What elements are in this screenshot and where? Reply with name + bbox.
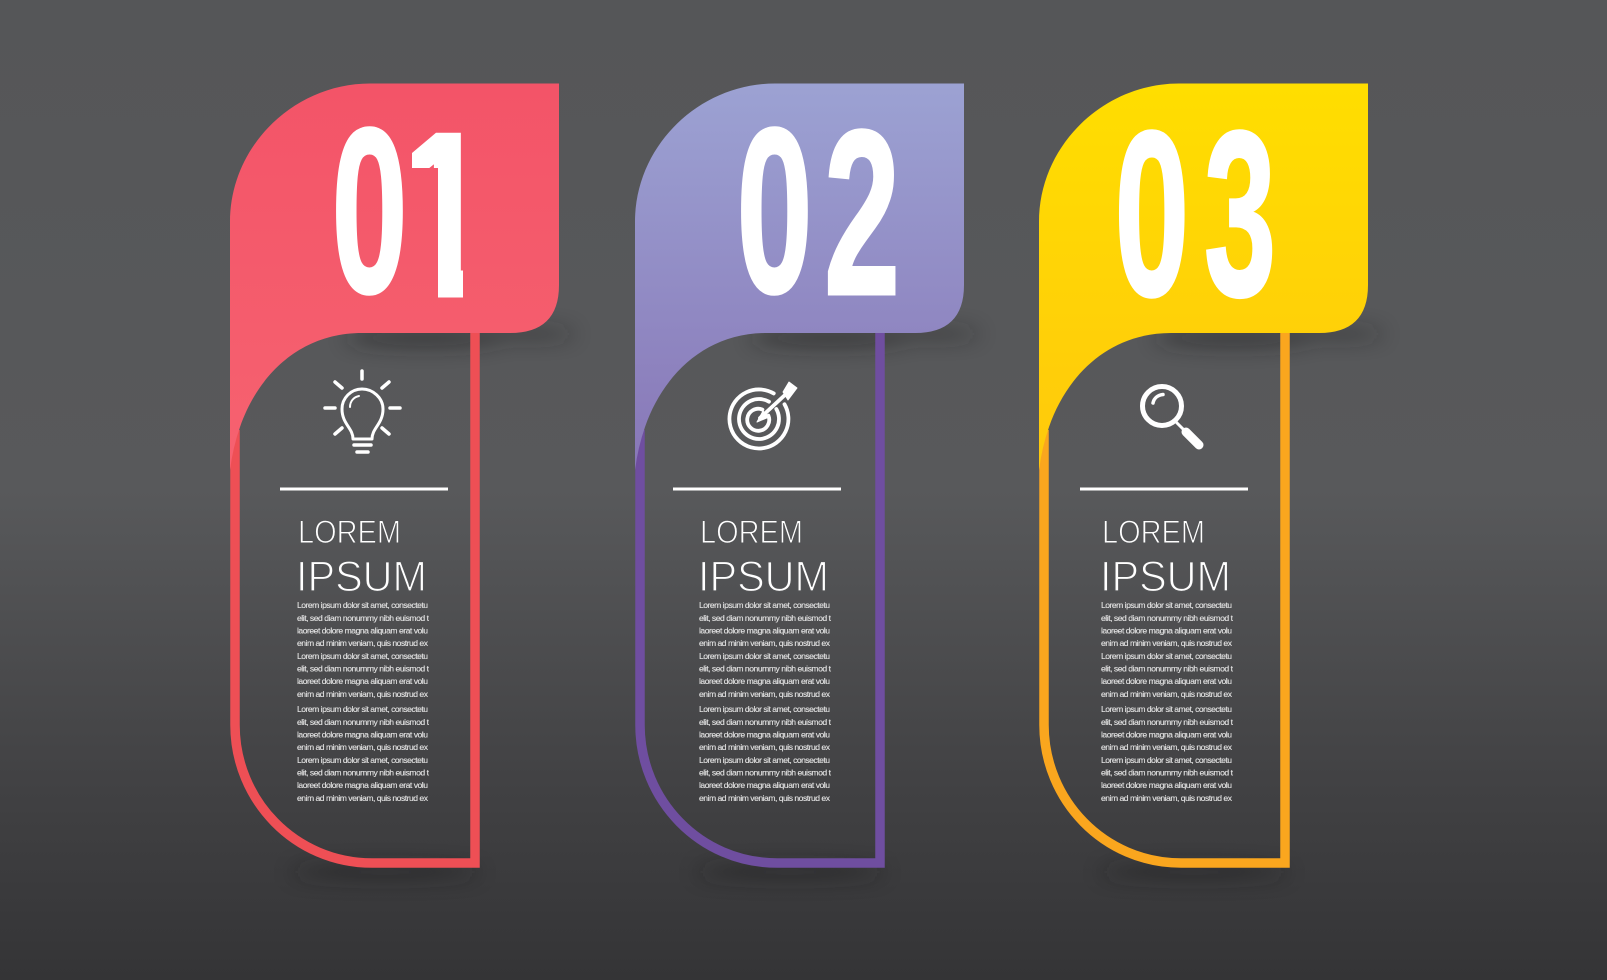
heading: LOREM bbox=[1102, 514, 1205, 550]
body text: enim ad minim veniam, quis nostrud ex bbox=[297, 689, 429, 699]
body text: Lorem ipsum dolor sit amet, consectetu bbox=[1101, 704, 1232, 714]
outline 01 bbox=[235, 333, 475, 863]
body text: Lorem ipsum dolor sit amet, consectetu bbox=[297, 600, 428, 610]
header shape 03 bbox=[1039, 84, 1368, 470]
body text: Lorem ipsum dolor sit amet, consectetu bbox=[297, 651, 428, 661]
body text: laoreet dolore magna aliquam erat volu bbox=[699, 780, 830, 790]
body text: Lorem ipsum dolor sit amet, consectetu bbox=[699, 704, 830, 714]
outline 02 bbox=[640, 333, 880, 863]
header shape 01 bbox=[230, 84, 559, 470]
panel: step 02 bbox=[635, 79, 980, 879]
heading: IPSUM bbox=[698, 553, 829, 601]
icon: target with dart bbox=[729, 382, 797, 448]
body text: Lorem ipsum dolor sit amet, consectetu bbox=[297, 704, 428, 714]
number 02: 0 bbox=[736, 79, 813, 342]
body text bbox=[699, 600, 832, 803]
divider bbox=[1080, 488, 1248, 490]
heading: IPSUM bbox=[296, 553, 427, 601]
number 02 bbox=[736, 79, 900, 344]
body text: laoreet dolore magna aliquam erat volu bbox=[297, 780, 428, 790]
body text: laoreet dolore magna aliquam erat volu bbox=[1101, 676, 1232, 686]
body text: enim ad minim veniam, quis nostrud ex bbox=[699, 742, 831, 752]
body text: elit, sed diam nonummy nibh euismod t bbox=[297, 717, 430, 727]
heading: LOREM bbox=[700, 514, 803, 550]
body text: enim ad minim veniam, quis nostrud ex bbox=[699, 793, 831, 803]
body text: enim ad minim veniam, quis nostrud ex bbox=[699, 689, 831, 699]
shadows 02 bbox=[695, 329, 980, 879]
body text: Lorem ipsum dolor sit amet, consectetu bbox=[699, 755, 830, 765]
panel: step 03 bbox=[1039, 83, 1384, 879]
body text: elit, sed diam nonummy nibh euismod t bbox=[297, 613, 430, 623]
number 03: 0 bbox=[1114, 83, 1189, 345]
body text: enim ad minim veniam, quis nostrud ex bbox=[1101, 742, 1233, 752]
icon: light bulb bbox=[325, 371, 400, 452]
icon: magnifying glass bbox=[1142, 386, 1199, 445]
heading bbox=[1100, 514, 1231, 601]
number 03 bbox=[1114, 83, 1276, 346]
body text: elit, sed diam nonummy nibh euismod t bbox=[297, 664, 430, 674]
divider bbox=[673, 488, 841, 490]
heading bbox=[698, 514, 829, 601]
body text: laoreet dolore magna aliquam erat volu bbox=[699, 626, 830, 636]
body text: Lorem ipsum dolor sit amet, consectetu bbox=[699, 600, 830, 610]
header shape 02 bbox=[635, 84, 964, 470]
body text: laoreet dolore magna aliquam erat volu bbox=[1101, 780, 1232, 790]
body text: laoreet dolore magna aliquam erat volu bbox=[699, 730, 830, 740]
body text: elit, sed diam nonummy nibh euismod t bbox=[297, 768, 430, 778]
body text: elit, sed diam nonummy nibh euismod t bbox=[1101, 613, 1234, 623]
body text: enim ad minim veniam, quis nostrud ex bbox=[1101, 689, 1233, 699]
divider bbox=[280, 488, 448, 490]
body text: laoreet dolore magna aliquam erat volu bbox=[297, 676, 428, 686]
body text: elit, sed diam nonummy nibh euismod t bbox=[699, 664, 832, 674]
body text: elit, sed diam nonummy nibh euismod t bbox=[1101, 768, 1234, 778]
body text: enim ad minim veniam, quis nostrud ex bbox=[297, 793, 429, 803]
heading: LOREM bbox=[298, 514, 401, 550]
number 02: 2 bbox=[824, 81, 900, 344]
body text bbox=[1101, 600, 1234, 803]
body text: elit, sed diam nonummy nibh euismod t bbox=[699, 613, 832, 623]
body text: Lorem ipsum dolor sit amet, consectetu bbox=[699, 651, 830, 661]
body text: enim ad minim veniam, quis nostrud ex bbox=[1101, 638, 1233, 648]
panel: step 01 bbox=[230, 79, 575, 879]
body text: Lorem ipsum dolor sit amet, consectetu bbox=[297, 755, 428, 765]
body text bbox=[297, 600, 430, 803]
number 01 bbox=[336, 126, 463, 298]
outline 03 bbox=[1044, 333, 1285, 863]
body text: laoreet dolore magna aliquam erat volu bbox=[1101, 626, 1232, 636]
body text: enim ad minim veniam, quis nostrud ex bbox=[699, 638, 831, 648]
body text: elit, sed diam nonummy nibh euismod t bbox=[1101, 717, 1234, 727]
body text: elit, sed diam nonummy nibh euismod t bbox=[1101, 664, 1234, 674]
body text: laoreet dolore magna aliquam erat volu bbox=[297, 730, 428, 740]
body text: enim ad minim veniam, quis nostrud ex bbox=[1101, 793, 1233, 803]
body text: laoreet dolore magna aliquam erat volu bbox=[699, 676, 830, 686]
body text: elit, sed diam nonummy nibh euismod t bbox=[699, 717, 832, 727]
number 03: 3 bbox=[1204, 83, 1276, 346]
heading bbox=[296, 514, 427, 601]
body text: laoreet dolore magna aliquam erat volu bbox=[297, 626, 428, 636]
number 01: 0 bbox=[332, 79, 408, 342]
shadows 01 bbox=[290, 329, 575, 879]
body text: laoreet dolore magna aliquam erat volu bbox=[1101, 730, 1232, 740]
number 01: 1 bbox=[393, 84, 493, 347]
body text: Lorem ipsum dolor sit amet, consectetu bbox=[1101, 755, 1232, 765]
body text: Lorem ipsum dolor sit amet, consectetu bbox=[1101, 600, 1232, 610]
body text: Lorem ipsum dolor sit amet, consectetu bbox=[1101, 651, 1232, 661]
body text: elit, sed diam nonummy nibh euismod t bbox=[699, 768, 832, 778]
body text: enim ad minim veniam, quis nostrud ex bbox=[297, 742, 429, 752]
body text: enim ad minim veniam, quis nostrud ex bbox=[297, 638, 429, 648]
shadows 03 bbox=[1099, 329, 1384, 879]
heading: IPSUM bbox=[1100, 553, 1231, 601]
